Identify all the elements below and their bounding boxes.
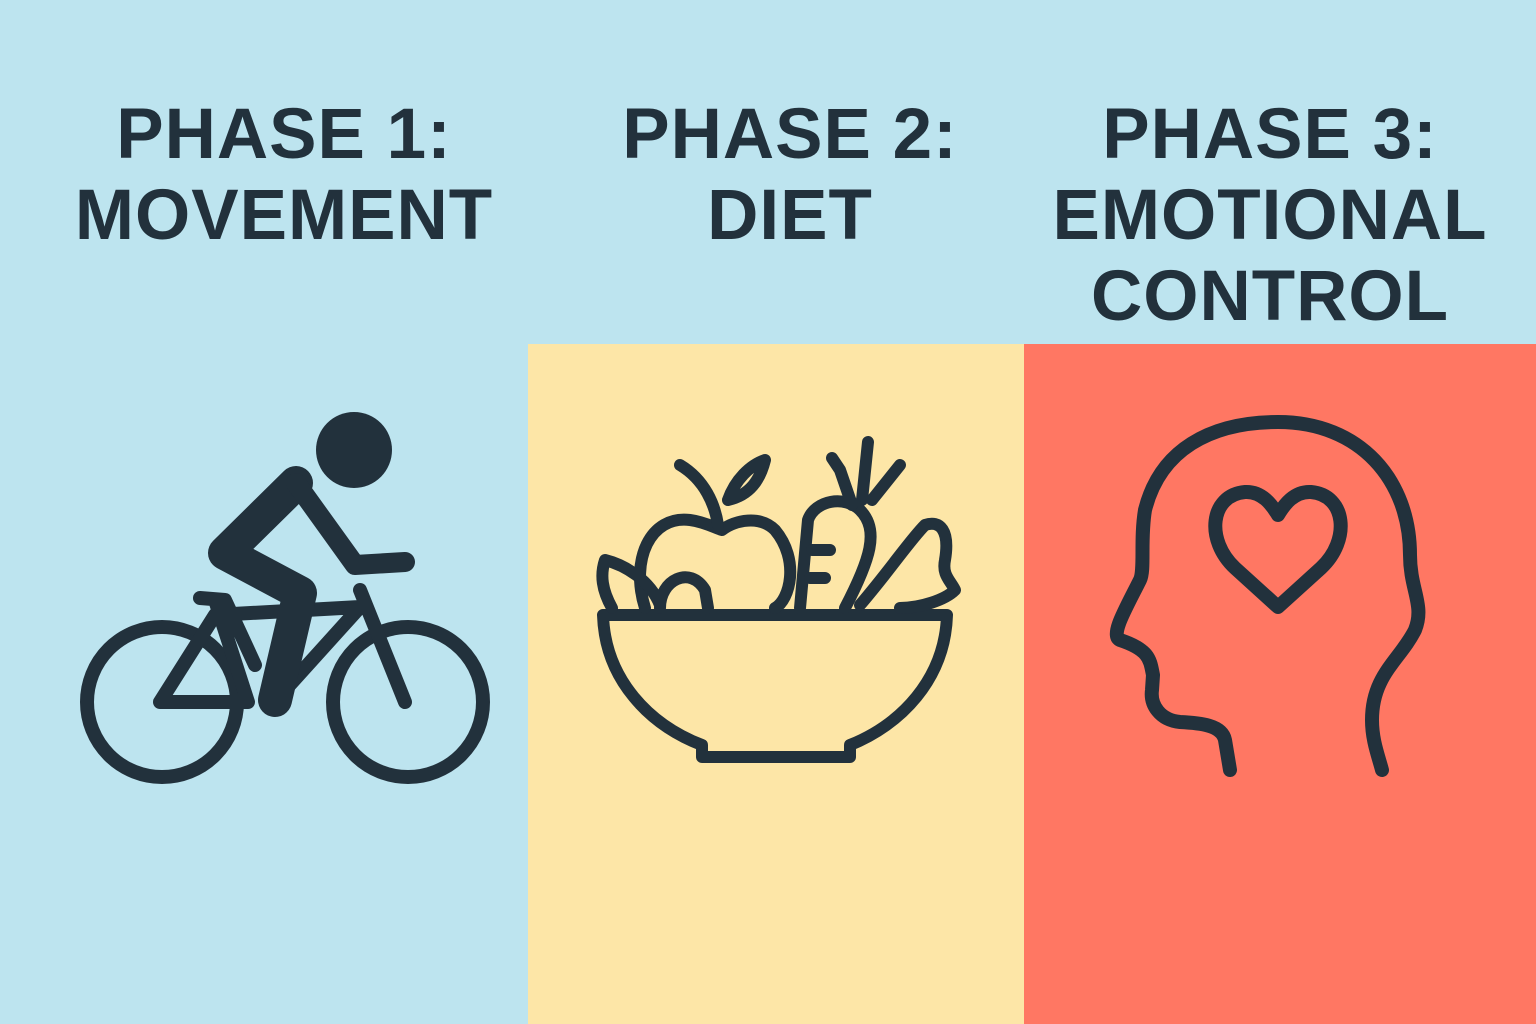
panel: emotional control background	[1024, 344, 1536, 1024]
heading: phase 1: MOVEMENT	[75, 176, 493, 255]
heading: phase 3: CONTROL	[1091, 257, 1449, 336]
heading: phase 3	[1053, 95, 1487, 336]
heading: phase 2: PHASE 2:	[622, 95, 958, 174]
icon: cyclist	[87, 412, 483, 777]
heading: phase 3: PHASE 3:	[1102, 95, 1438, 174]
panel: diet background	[528, 344, 1024, 1024]
heading: phase 2: DIET	[707, 176, 873, 255]
icon: head with heart	[1117, 422, 1418, 770]
heading: phase 3: EMOTIONAL	[1053, 176, 1487, 255]
heading: phase 1: PHASE 1:	[116, 95, 452, 174]
heading: phase 1	[75, 95, 493, 255]
icon: bowl of fruit and vegetables	[602, 442, 955, 757]
heading: phase 2	[622, 95, 958, 255]
